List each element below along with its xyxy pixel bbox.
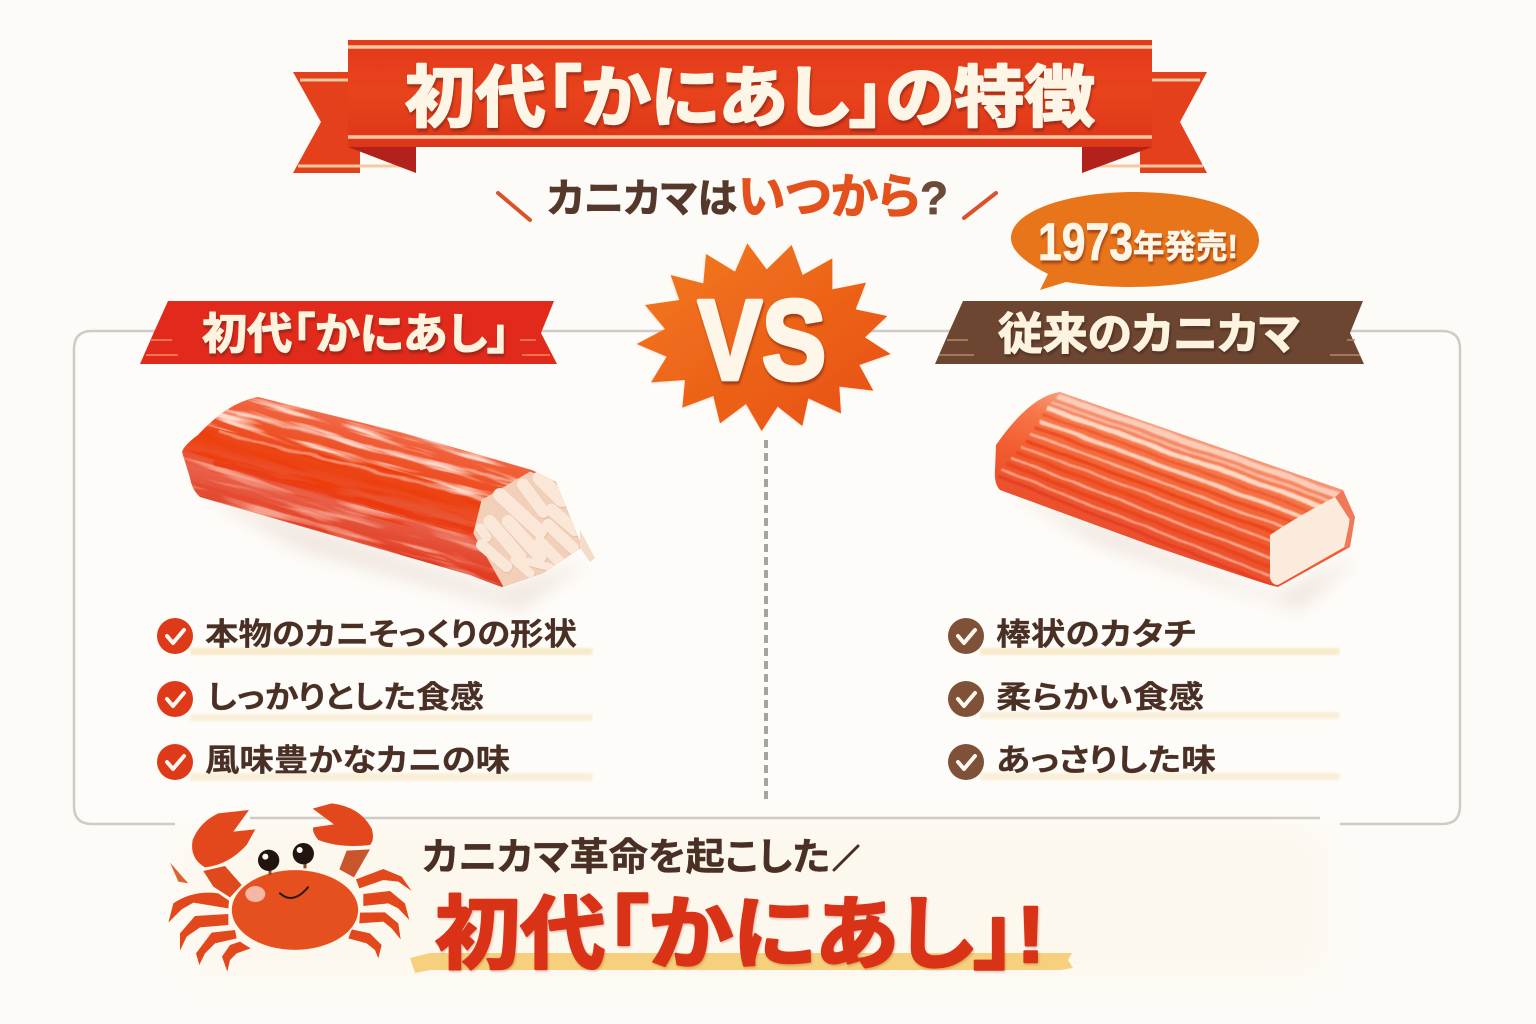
left legs <box>168 893 229 923</box>
callout: 1973 release: 1973 <box>1038 213 1133 272</box>
list text 2: しっかりとした食感 <box>207 680 484 715</box>
feature list: first-generation <box>157 617 593 781</box>
ribbon label right: 従来のカニカマ <box>998 310 1300 359</box>
check icon 6 <box>948 744 984 780</box>
panel: comparison frame <box>74 331 1460 824</box>
title banner <box>293 40 1207 173</box>
crab stick: conventional with clean cut <box>985 385 1365 610</box>
conclusion lead text: カニカマ革命を起こした <box>422 837 830 879</box>
list text 4: 棒状のカタチ <box>996 617 1196 652</box>
subheading: when: ? <box>920 172 948 224</box>
subheading: when: いつから <box>738 171 920 224</box>
feature list: conventional <box>948 617 1340 780</box>
divider dashed line <box>764 440 768 800</box>
crab stick: first-generation with shredded end <box>182 397 595 612</box>
check icon 3 <box>157 744 193 780</box>
right legs <box>356 869 412 891</box>
check icon 1 <box>157 618 193 654</box>
subheading: when <box>498 171 996 224</box>
right claw <box>313 803 373 846</box>
crab body <box>231 869 359 951</box>
crab eyes <box>258 843 314 875</box>
VS burst <box>637 243 891 431</box>
left claw <box>192 810 255 867</box>
brush stroke <box>410 953 1073 973</box>
callout: 1973 release: 年発売! <box>1133 228 1238 265</box>
conclusion main text: 初代「かにあし」! <box>435 890 1045 979</box>
title text: 初代「かにあし」の特徴 <box>405 61 1095 136</box>
list text 6: あっさりした味 <box>996 743 1216 778</box>
icon: crab mascot <box>168 803 412 972</box>
clean cut end <box>1270 497 1350 585</box>
list text 1: 本物のカニそっくりの形状 <box>205 617 577 652</box>
VS text: VS <box>698 277 826 403</box>
subheading: when: カニカマは <box>547 177 737 221</box>
ribbon: first-generation Kaniashi <box>140 301 557 364</box>
ribbon label left: 初代「かにあし」 <box>202 311 510 359</box>
check icon 5 <box>948 681 984 717</box>
list text 3: 風味豊かなカニの味 <box>205 743 510 778</box>
list text 5: 柔らかい食感 <box>996 680 1204 715</box>
shredded cut end <box>473 472 582 587</box>
conclusion band <box>185 818 1325 979</box>
callout: 1973 release <box>1011 192 1259 290</box>
check icon 2 <box>157 681 193 717</box>
ribbon: conventional kanikama <box>935 301 1364 364</box>
check icon 4 <box>948 618 984 654</box>
arms <box>203 866 242 897</box>
